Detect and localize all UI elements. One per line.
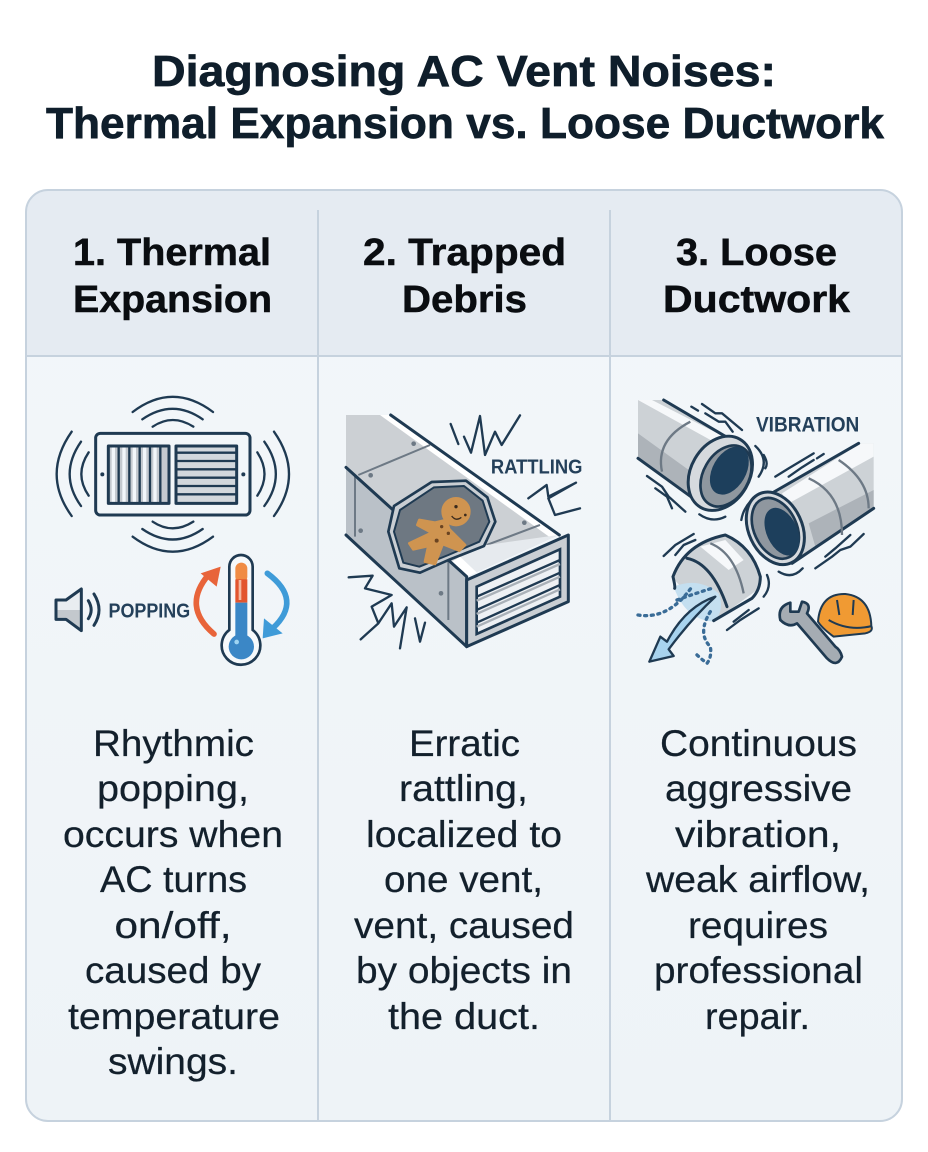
- text block: thermal expansion description: on/off,: [114, 905, 232, 946]
- title: Diagnosing AC Vent Noises:: [152, 47, 776, 96]
- hard hat: [818, 594, 872, 637]
- text block: trapped debris description: Erratic: [409, 723, 520, 764]
- text block: thermal expansion description: occurs when: [63, 814, 283, 855]
- text block: trapped debris description: vent, caused: [354, 905, 574, 946]
- text block: loose ductwork description: weak airflow,: [645, 859, 870, 900]
- pipe lower: [672, 535, 760, 622]
- airflow arrow: [638, 587, 715, 663]
- heading: loose ductwork: 3. Loose: [676, 232, 837, 274]
- pipe upper right: [735, 443, 874, 574]
- text block: trapped debris description: one vent,: [384, 859, 543, 900]
- text block: trapped debris description: the duct.: [388, 996, 540, 1037]
- arrow: heating: [196, 567, 221, 634]
- sound waves: [57, 397, 289, 552]
- pipe upper left: [638, 400, 765, 522]
- impact lines: [349, 415, 580, 648]
- heading: loose ductwork: [663, 232, 851, 321]
- text block: trapped debris description: rattling,: [399, 768, 528, 809]
- text block: loose ductwork description: [645, 723, 870, 1037]
- label: popping: POPPING: [108, 599, 190, 622]
- hole in duct: [388, 481, 495, 573]
- heading: trapped debris: 2. Trapped: [363, 232, 566, 274]
- label: rattling: RATTLING: [491, 455, 582, 478]
- icon: rectangular duct with trapped debris: [346, 415, 582, 648]
- text block: trapped debris description: by objects in: [356, 950, 572, 991]
- heading: thermal expansion: [73, 232, 272, 321]
- text block: thermal expansion description: caused by: [85, 950, 262, 991]
- text block: loose ductwork description: Continuous: [660, 723, 857, 764]
- duct top face: [346, 415, 558, 577]
- wrench: [780, 602, 842, 663]
- heading: thermal expansion: Expansion: [73, 279, 272, 321]
- text block: trapped debris description: [354, 723, 574, 1037]
- text block: loose ductwork description: professional: [654, 950, 863, 991]
- text block: loose ductwork description: vibration,: [675, 814, 841, 855]
- label: vibration: VIBRATION: [756, 413, 859, 437]
- duct highlights and seams: [346, 415, 559, 647]
- heading: trapped debris: [363, 232, 566, 321]
- text block: thermal expansion description: [63, 723, 283, 1082]
- text block: loose ductwork description: requires: [688, 905, 828, 946]
- arrow: cooling: [263, 573, 287, 638]
- title: [46, 47, 885, 148]
- text block: loose ductwork description: aggressive: [665, 768, 852, 809]
- speaker: [56, 589, 99, 631]
- thermometer: [222, 555, 260, 665]
- text block: thermal expansion description: AC turns: [100, 859, 247, 900]
- icon: vibrating vent with popping sound and thermometer: [56, 397, 289, 665]
- vent grille: [96, 433, 250, 515]
- heading: loose ductwork: Ductwork: [663, 279, 851, 321]
- heading: thermal expansion: 1. Thermal: [73, 232, 271, 274]
- heading: trapped debris: Debris: [402, 279, 527, 321]
- duct side face: [346, 467, 467, 647]
- text block: loose ductwork description: repair.: [705, 996, 810, 1037]
- debris: cookie shape: [409, 498, 469, 564]
- text block: thermal expansion description: swings.: [108, 1041, 238, 1082]
- text block: trapped debris description: localized to: [366, 814, 562, 855]
- text block: thermal expansion description: Rhythmic: [93, 723, 254, 764]
- vibration lines: [647, 404, 864, 630]
- text block: thermal expansion description: popping,: [97, 768, 249, 809]
- title: Thermal Expansion vs. Loose Ductwork: [46, 99, 885, 148]
- text block: thermal expansion description: temperature: [68, 996, 280, 1037]
- panel: comparison table: [26, 190, 902, 1121]
- icon: separated round duct pipes: [638, 400, 874, 663]
- duct front grille: [467, 535, 568, 647]
